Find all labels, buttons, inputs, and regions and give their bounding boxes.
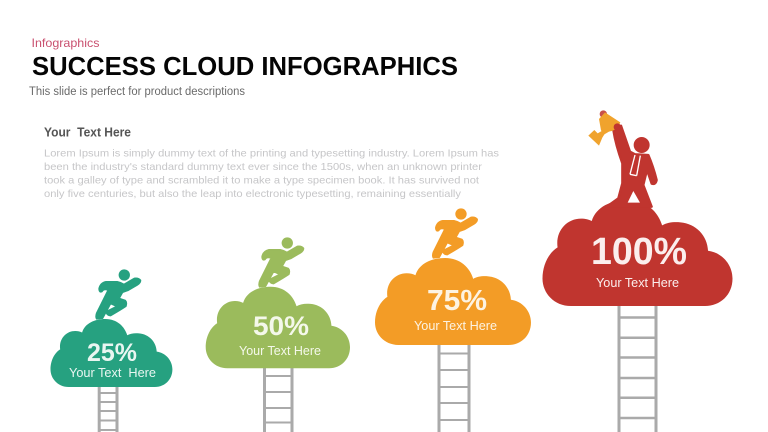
- label 75: Your Text Here: [414, 319, 497, 333]
- cloud 50: [206, 287, 350, 368]
- ladder 75: [439, 343, 469, 432]
- value 100: 100%: [591, 231, 687, 273]
- header block: [29, 36, 458, 98]
- label 25: Your Text Here: [69, 366, 156, 380]
- subtitle: This slide is perfect for product descriptions: [29, 86, 245, 98]
- ladder 25: [99, 386, 117, 432]
- label 100: Your Text Here: [596, 276, 679, 290]
- description body: been the industry's standard dummy text ever since the 1500s, when an unknown printer: [44, 161, 483, 173]
- runner icon 75: [433, 208, 477, 258]
- description heading: Your Text Here: [44, 126, 131, 140]
- value 50: 50%: [253, 311, 309, 341]
- cloud 25: [50, 319, 172, 387]
- businessman with trophy icon: [588, 110, 657, 207]
- step 25 percent: [50, 269, 172, 432]
- value 75: 75%: [427, 285, 487, 317]
- step 100 percent: [542, 110, 733, 432]
- description body: [44, 148, 499, 200]
- cloud 75: [375, 258, 531, 345]
- label 50: Your Text Here: [239, 344, 321, 358]
- category label: Infographics: [32, 36, 100, 50]
- value 25: 25%: [87, 339, 137, 367]
- runner icon 25: [96, 269, 141, 319]
- text block: description: [44, 126, 499, 200]
- step 50 percent: [206, 237, 350, 432]
- description body: Lorem Ipsum is simply dummy text of the printing and typesetting industry. Lorem Ipsum has: [44, 148, 499, 160]
- ladder 100: [619, 304, 656, 432]
- description body: only five centuries, but also the leap into electronic typesetting, remaining essentially: [44, 188, 462, 200]
- ladder 50: [264, 366, 292, 432]
- cloud 100: [542, 200, 733, 306]
- step 75 percent: [375, 208, 531, 432]
- runner icon 50: [259, 237, 304, 287]
- description body: took a galley of type and scrambled it to make a type specimen book. It has survived not: [44, 174, 479, 186]
- title: SUCCESS CLOUD INFOGRAPHICS: [32, 51, 458, 81]
